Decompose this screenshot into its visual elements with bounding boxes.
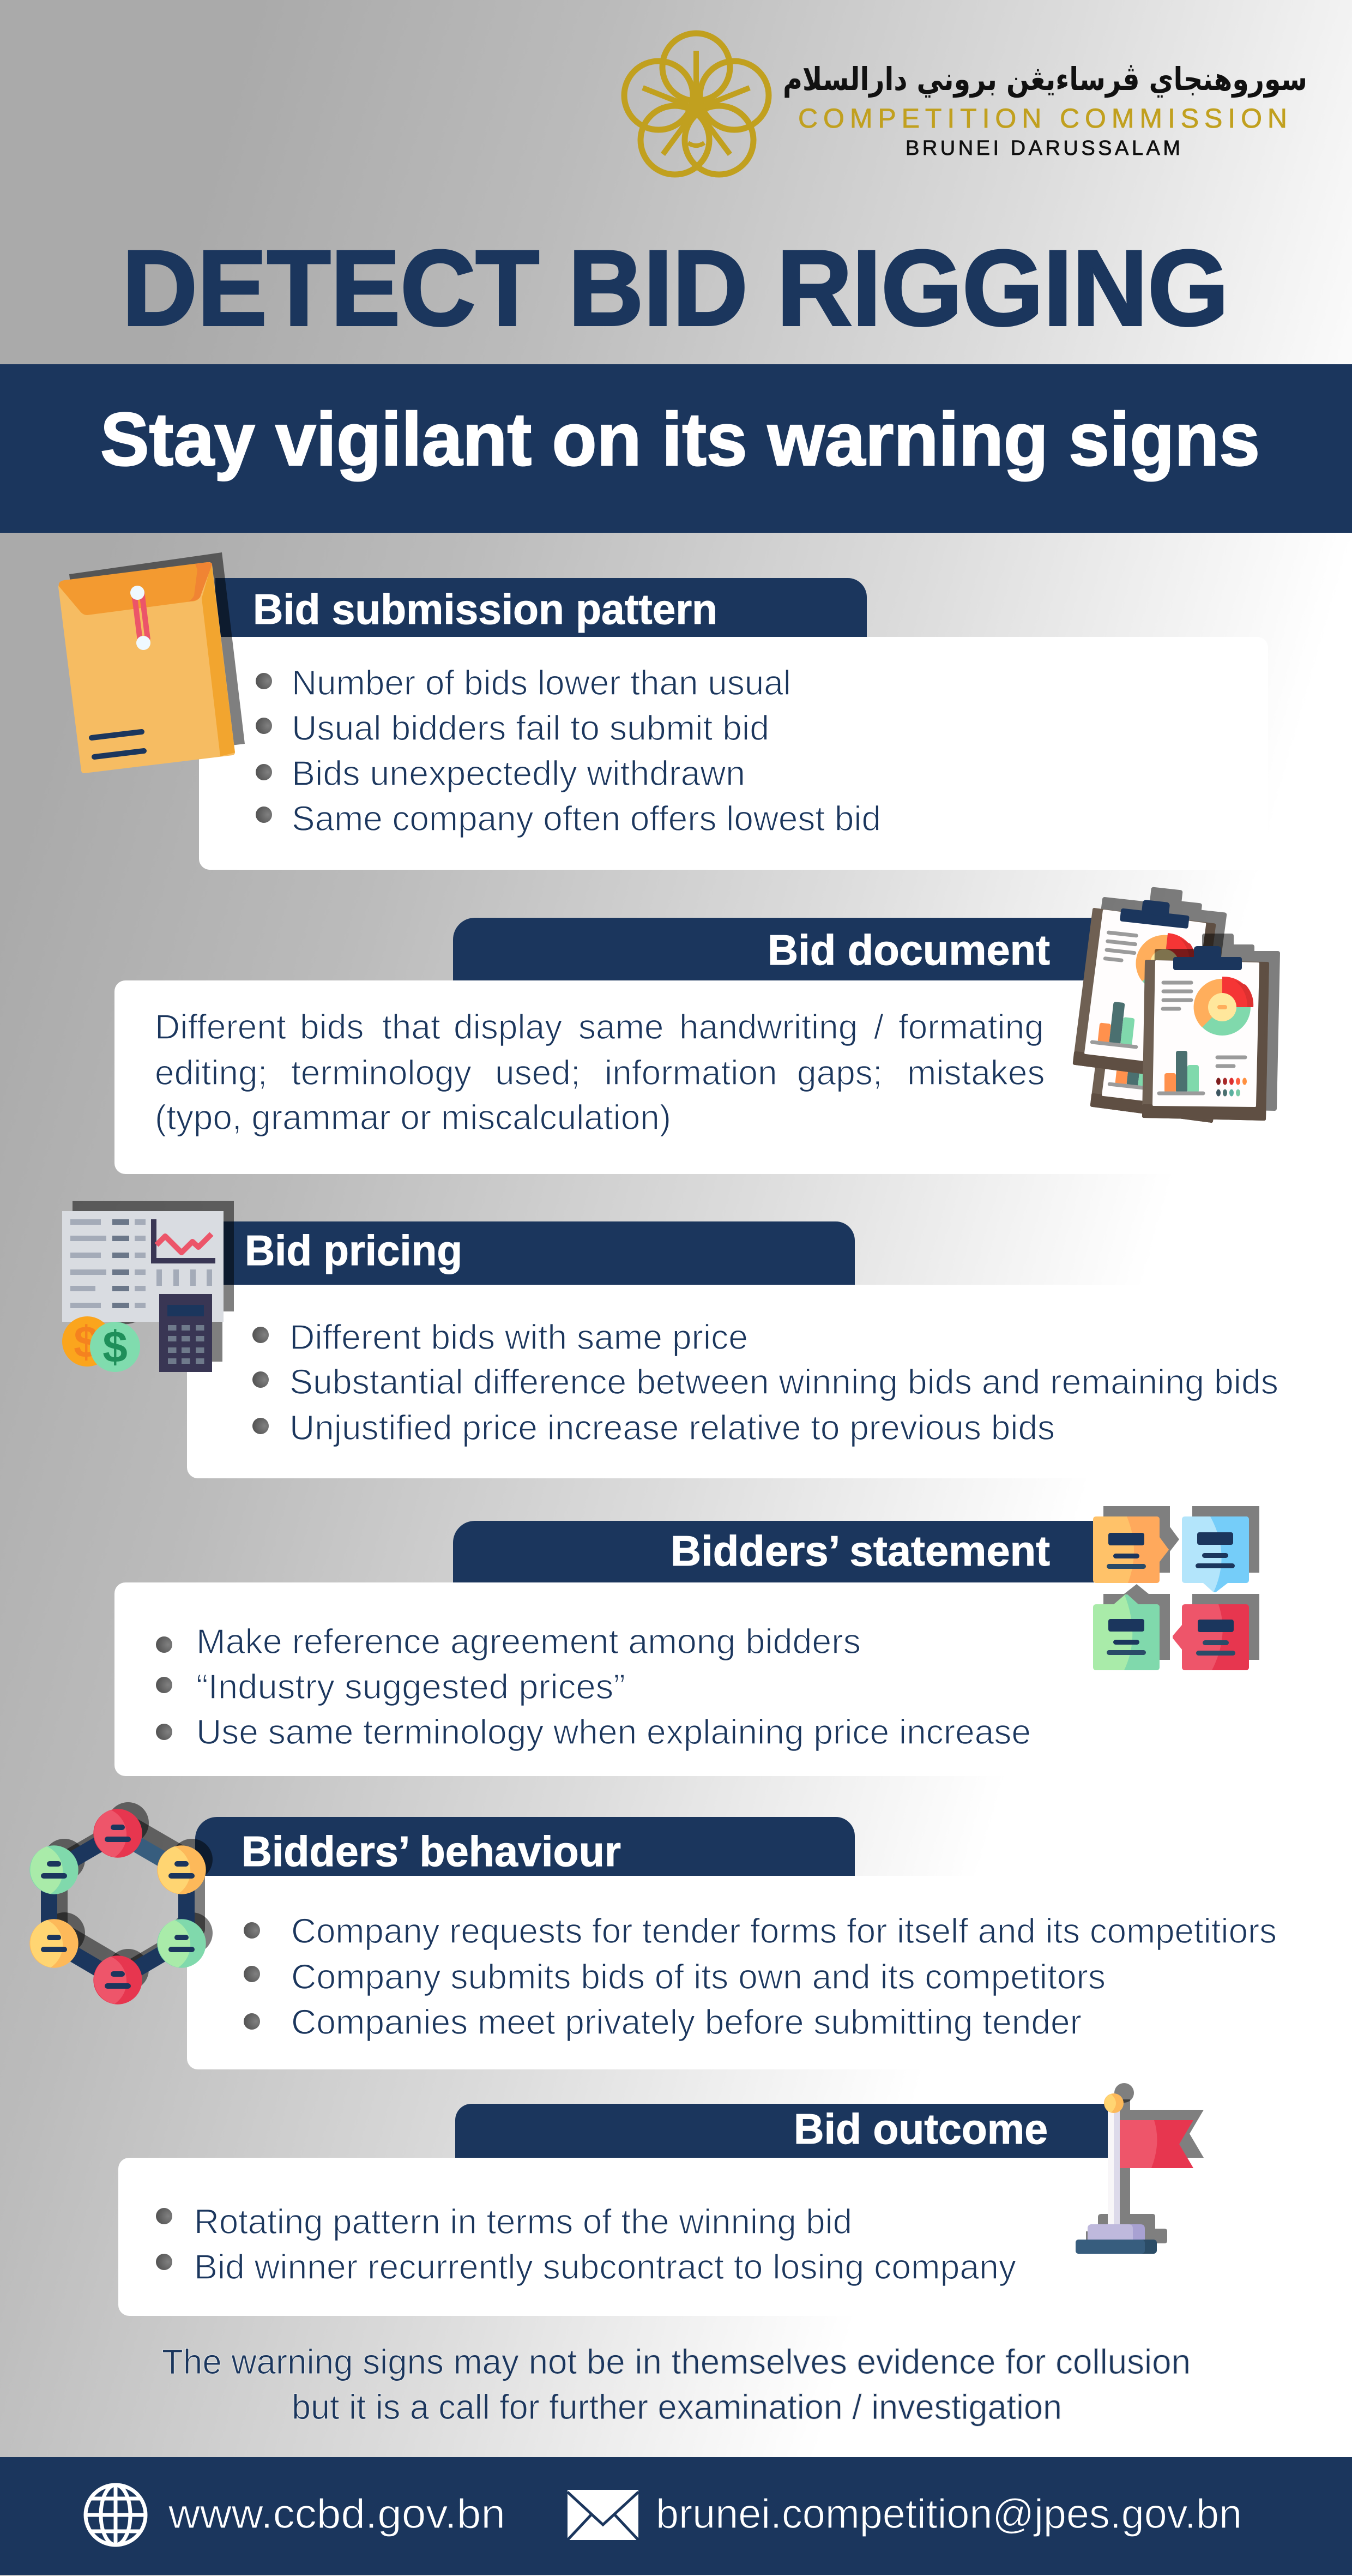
header bar — [195, 1817, 855, 1876]
icon: hexagon network of nodes — [29, 1802, 213, 2005]
card — [114, 1582, 1270, 1776]
panel: bid outcome — [118, 2083, 1269, 2316]
bullet list — [244, 1911, 1277, 2042]
red bubble — [1173, 1604, 1249, 1670]
closing note: The warning signs may not be in themselves evidence for collusion — [162, 2342, 1191, 2381]
icon: four speech bubbles — [1093, 1506, 1259, 1670]
header bar — [455, 2104, 1108, 2158]
paragraph: terminology — [291, 1053, 481, 1092]
bullet list — [156, 2202, 1016, 2286]
bullet list: Use same terminology when explaining price increase — [196, 1712, 1031, 1752]
panel: bid pricing — [62, 1201, 1294, 1478]
header bar — [453, 918, 1096, 980]
paragraph: bids — [300, 1007, 373, 1046]
paragraph: gaps; — [797, 1053, 892, 1092]
email: brunei.competition@jpes.gov.bn — [656, 2491, 1242, 2537]
icon: globe — [86, 2485, 146, 2545]
paragraph: / — [874, 1007, 894, 1046]
heading: Bid outcome — [794, 2105, 1048, 2153]
paragraph: used; — [495, 1053, 590, 1092]
blue bubble — [1182, 1516, 1249, 1592]
logo name: COMPETITION COMMISSION — [798, 103, 1287, 134]
website: www.ccbd.gov.bn — [168, 2491, 505, 2537]
title: DETECT BID RIGGING — [122, 228, 1229, 348]
icon: spreadsheet, coins and calculator — [62, 1201, 234, 1372]
bullet list: Bid winner recurrently subcontract to losing company — [194, 2247, 1016, 2286]
closing note — [162, 2342, 1191, 2427]
card — [187, 1285, 1294, 1478]
icon: envelope — [568, 2490, 638, 2540]
bullet list: Bids unexpectedly withdrawn — [292, 754, 745, 793]
bullet list: Make reference agreement among bidders — [196, 1622, 861, 1661]
icon: spreadsheet, coins and calculator: $ — [74, 1317, 99, 1367]
logo emblem — [624, 33, 769, 174]
paragraph: (typo, grammar or miscalculation) — [155, 1098, 671, 1137]
header bar — [215, 578, 867, 637]
icon: envelope — [59, 552, 245, 771]
paragraph — [155, 1007, 1045, 1137]
panel: bidders' statement — [114, 1506, 1270, 1776]
panel: bid document — [114, 884, 1278, 1174]
header bar — [453, 1521, 1096, 1582]
bullet list: Company requests for tender forms for itself and its competitiors — [291, 1911, 1277, 1951]
card — [187, 1876, 1294, 2069]
orange bubble — [1093, 1516, 1169, 1583]
green bubble — [1093, 1594, 1160, 1670]
panel: bid submission pattern — [59, 552, 1268, 870]
paragraph: information — [605, 1053, 787, 1092]
paragraph: that — [382, 1007, 450, 1046]
bullet list: Unjustified price increase relative to previous bids — [289, 1408, 1055, 1447]
card — [199, 637, 1268, 870]
bullet list: “Industry suggested prices” — [196, 1667, 625, 1706]
heading: Bid pricing — [245, 1226, 462, 1274]
paragraph: formating — [898, 1007, 1044, 1046]
bullet list — [256, 663, 881, 838]
header bar — [224, 1221, 855, 1285]
bullet list: Rotating pattern in terms of the winning bid — [194, 2202, 852, 2241]
paragraph: handwriting — [679, 1007, 867, 1046]
bullet list — [252, 1317, 1278, 1447]
panel: bidders' behaviour — [29, 1802, 1294, 2069]
subtitle band — [0, 364, 1352, 533]
bullet list: Same company often offers lowest bid — [292, 799, 881, 838]
card — [114, 980, 1265, 1174]
paragraph: display — [454, 1007, 572, 1046]
bullet list: Substantial difference between winning bids and remaining bids — [289, 1362, 1278, 1401]
heading: Bidders’ behaviour — [242, 1827, 621, 1875]
bullet list: Different bids with same price — [289, 1317, 748, 1357]
icon: spreadsheet, coins and calculator: $ — [102, 1322, 128, 1372]
bullet list: Number of bids lower than usual — [292, 663, 791, 702]
logo: Competition Commission Brunei Darussalam — [624, 33, 1307, 174]
heading: Bid submission pattern — [253, 585, 717, 633]
subtitle: Stay vigilant on its warning signs — [100, 398, 1260, 482]
heading: Bidders’ statement — [671, 1527, 1050, 1575]
icon: clipboards with charts — [1074, 884, 1278, 1122]
bullet list: Usual bidders fail to submit bid — [292, 708, 769, 748]
logo country: BRUNEI DARUSSALAM — [906, 137, 1180, 160]
bullet list: Company submits bids of its own and its competitors — [291, 1957, 1106, 1996]
paragraph: mistakes — [907, 1053, 1045, 1092]
footer band — [0, 2457, 1352, 2575]
paragraph: same — [578, 1007, 673, 1046]
icon: red flag — [1076, 2083, 1204, 2254]
paragraph: editing; — [155, 1053, 277, 1092]
closing note: but it is a call for further examination / investigation — [292, 2387, 1062, 2427]
heading: Bid document — [768, 926, 1050, 974]
bullet list — [156, 1622, 1031, 1752]
bullet list: Companies meet privately before submitting tender — [291, 2002, 1082, 2042]
card — [118, 2158, 1269, 2316]
paragraph: Different — [155, 1007, 295, 1046]
